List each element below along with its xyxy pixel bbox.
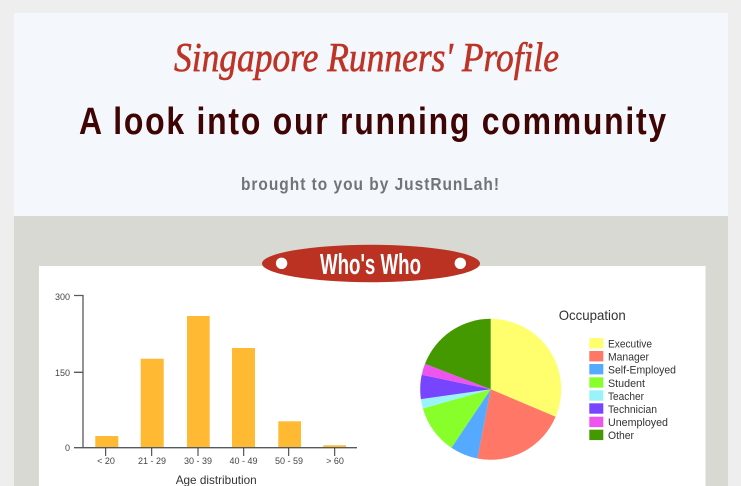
subtitle: A look into our running community (79, 100, 667, 143)
pie chart title: Occupation (559, 307, 626, 323)
x axis labels: > 60 (326, 456, 344, 466)
y axis labels (55, 292, 70, 453)
x axis labels: 21 - 29 (138, 456, 166, 466)
credit line: brought to you by JustRunLah! (241, 174, 499, 194)
y axis labels: 300 (55, 292, 70, 302)
title: Singapore Runners' Profile (174, 34, 559, 80)
x axis labels: < 20 (97, 456, 115, 466)
badge dot left (276, 258, 287, 269)
x axis labels: 50 - 59 (275, 456, 303, 466)
badge heading: Who's Who (320, 249, 421, 281)
pie chart legend: Other (608, 430, 634, 442)
pie chart legend: Teacher (608, 391, 644, 403)
section badge (262, 245, 480, 282)
badge dot right (455, 258, 466, 269)
bar chart: age distribution (55, 292, 357, 486)
pie chart legend: Technician (608, 404, 657, 416)
x axis labels: 40 - 49 (229, 456, 258, 466)
x axis labels (97, 456, 344, 466)
pie chart legend: Executive (608, 338, 652, 350)
pie chart legend: Manager (608, 352, 649, 364)
y axis labels: 150 (55, 368, 70, 378)
pie chart legend: Student (608, 378, 645, 390)
y axis labels: 0 (65, 443, 70, 453)
x axis labels: 30 - 39 (184, 456, 212, 466)
pie chart: occupation (420, 319, 561, 460)
pie chart legend (589, 338, 676, 442)
panel: who's who section (14, 216, 728, 486)
panel: header (14, 13, 728, 216)
pie chart legend: Self-Employed (608, 364, 676, 376)
pie chart legend: Unemployed (608, 417, 668, 429)
bars (95, 316, 346, 448)
